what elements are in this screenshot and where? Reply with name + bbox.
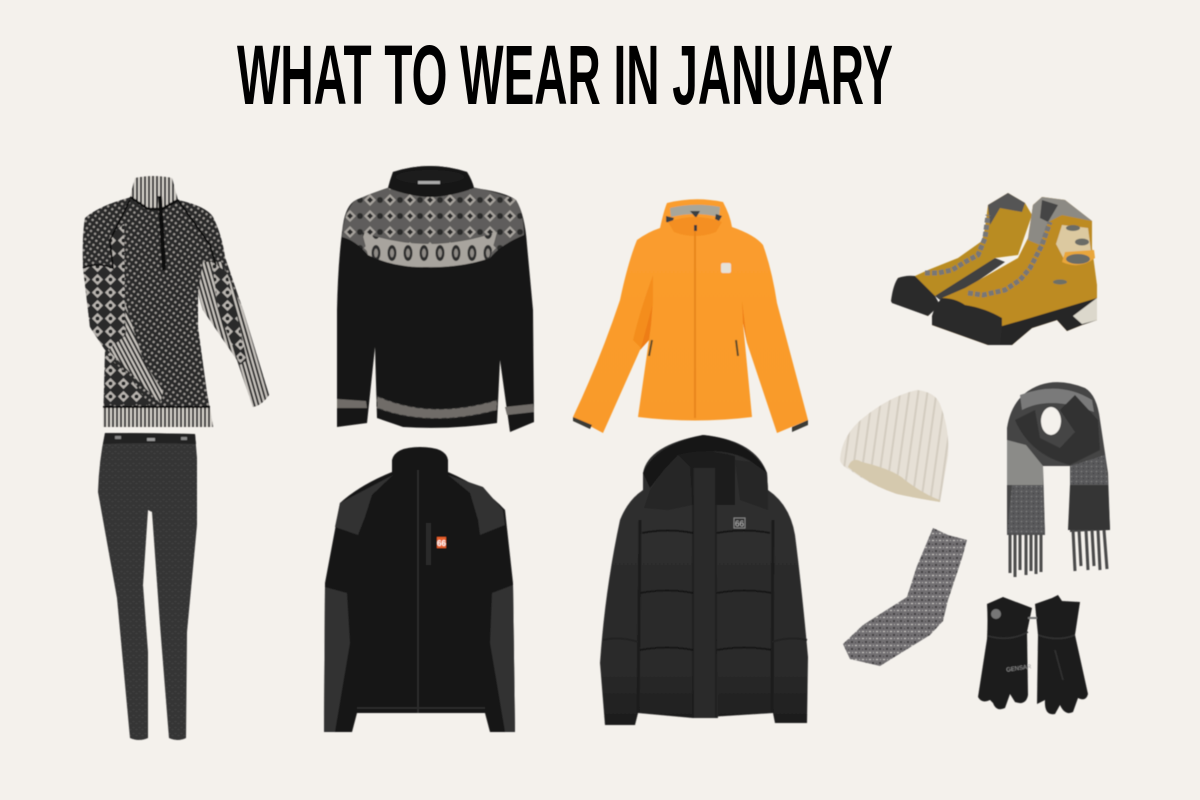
- icon: black puffer jacket with hood: [600, 435, 808, 725]
- back boot: [891, 193, 1032, 316]
- icon: black fleece jacket: [324, 447, 515, 732]
- icon: black ski gloves: [978, 595, 1088, 714]
- icon: orange rain jacket: [573, 199, 808, 433]
- icon: black puffer jacket with hood: 66: [735, 520, 744, 528]
- icon: hiking boots: [891, 193, 1097, 345]
- icon: Icelandic wool sweater: [337, 166, 534, 432]
- icon: plaid scarf: [1007, 382, 1110, 577]
- left glove: [978, 597, 1032, 709]
- icon: black fleece jacket: 66: [437, 539, 446, 548]
- icon: patterned base layer top: [83, 176, 269, 427]
- front boot: [932, 197, 1097, 345]
- icon: cream knit beanie: [840, 390, 948, 502]
- icon: base layer leggings: [98, 433, 197, 740]
- icon: grey wool sock: [843, 528, 967, 666]
- right glove: [1035, 595, 1088, 714]
- icon: black ski gloves: GENSAR: [1006, 664, 1032, 674]
